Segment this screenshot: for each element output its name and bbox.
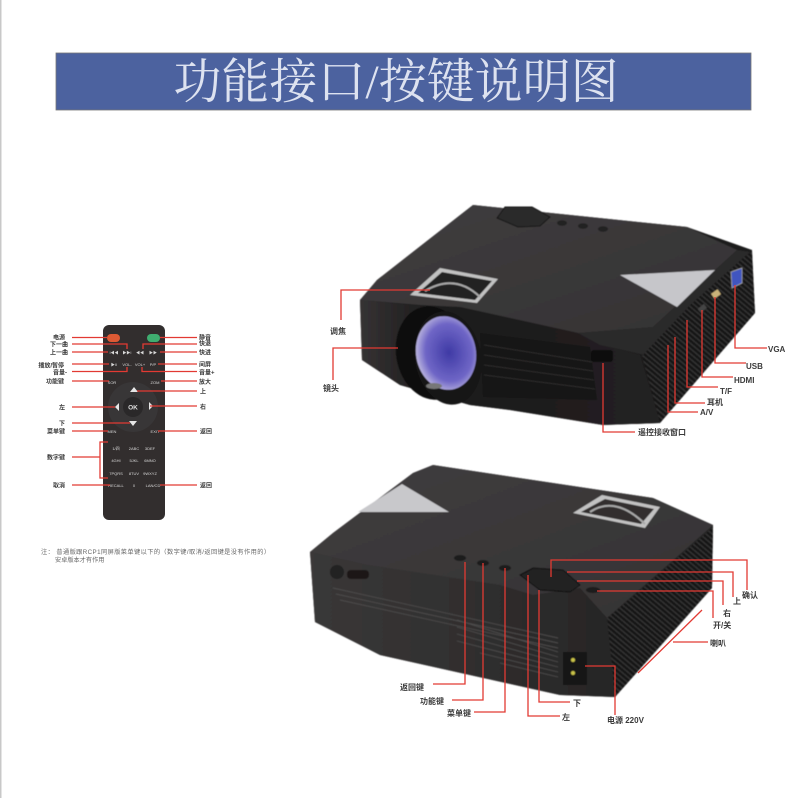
remote labels left [38,334,68,490]
remote labels right: 快退 [199,340,211,348]
remote key labels: 9WXYZ [143,471,157,476]
upper projector vent panel [480,333,597,400]
upper projector front face [360,300,660,425]
lower projector labels [400,590,758,725]
remote labels right: 上 [200,388,206,396]
upper projector labels: 耳机 [707,397,723,407]
lower projector light panel [358,484,449,512]
lower projector labels: 电源 220V [607,715,645,725]
upper projector labels: VGA [768,345,786,354]
remote labels left: 菜单键 [47,428,65,436]
remote labels left: 功能键 [46,378,64,386]
remote key labels: 3DEF [145,446,156,451]
remote labels right: 右 [200,403,206,411]
remote key labels: ZOM [151,380,159,385]
remote labels right: 放大 [199,378,211,386]
lower projector labels: 确认 [742,590,758,600]
upper projector labels: A/V [700,408,714,417]
lower projector labels: 左 [562,712,570,722]
remote labels left: 音量- [53,368,67,376]
remote key labels: 4GHI [111,458,121,463]
remote labels right: 间屏 [199,360,211,368]
remote key labels: I◀◀ [109,350,119,355]
remote control [103,325,165,520]
remote key labels: 7PQRS [109,471,123,476]
upper projector labels: HDMI [734,376,754,385]
footnote: 安卓版本才有作用 [55,556,104,564]
upper focus window [410,268,498,303]
lower projector front face [310,552,615,697]
remote labels right: 返回 [200,428,212,436]
upper projector labels: 遥控接收窗口 [638,427,686,437]
lower projector side grille [607,527,713,697]
lower projector labels: 开/关 [713,620,731,630]
lower projector labels: 下 [573,699,581,708]
projector: upper view [323,205,786,437]
upper projector vents [484,345,595,389]
upper projector side grille [642,252,755,423]
title banner: 功能接口/按键说明图 [173,56,619,109]
upper projector top face [360,205,737,333]
upper projector labels: T/F [720,387,732,396]
remote labels left: 下一曲 [50,340,68,348]
upper projector callout lines [333,285,767,432]
remote labels right [199,334,215,490]
remote key labels: 5JKL [129,458,139,463]
remote power button [107,334,120,342]
remote labels right: 音量+ [199,368,215,376]
remote key labels: MEN [108,429,117,434]
remote labels left: 电源 [53,334,65,342]
lower projector labels: 返回键 [400,682,424,692]
receiver window [591,350,613,362]
upper projector labels: 调焦 [330,326,346,336]
remote key labels: SOR [108,380,116,385]
lower projector labels: 功能键 [420,696,444,706]
lower projector labels: 菜单键 [447,708,471,718]
remote direction arrows [115,387,153,426]
lower projector body [310,465,713,697]
remote key labels: ▶▶ [149,350,157,355]
remote key labels: ◀◀ [136,350,144,355]
lower control pad [520,568,580,592]
remote labels left: 播放/暂停 [38,362,64,370]
page left edge [0,0,2,798]
remote key labels: 6MNO [144,458,156,463]
remote key labels: 2ABC [129,446,139,451]
remote labels left: 取消 [53,482,65,490]
remote labels right: 返回 [200,482,212,490]
upper projector labels [323,326,786,437]
upper projector light panel [620,270,715,307]
remote key labels: VOL- [122,362,132,367]
upper projector chamfer [578,250,750,355]
upper control pad [497,207,550,227]
footnote [41,548,270,564]
remote key labels: ▶▶I [122,350,132,355]
remote labels right: 静音 [199,334,211,342]
remote labels left: 上一曲 [50,348,68,356]
remote labels left: 左 [59,404,65,412]
remote key labels: 8TUV [129,471,139,476]
remote mute button [147,334,160,342]
remote labels left: 数字键 [47,454,65,462]
upper projector labels: USB [746,362,763,371]
lower projector top face [310,465,713,618]
projector: lower view [310,465,758,725]
lower focus window [573,495,660,528]
title banner [56,53,751,110]
remote key labels: OK [128,404,138,412]
lower projector labels: 喇叭 [710,638,726,648]
lower projector labels: 右 [723,608,731,618]
remote key labels: P/P [150,362,157,367]
remote labels left: 下 [59,420,65,428]
lower projector callout lines [433,560,747,716]
remote key labels: VOL+ [135,362,146,367]
lower projector labels: 上 [733,596,741,606]
footnote: 注： 普通版跟RCP1同屏版菜单键以下的（数字键/取消/返回键是没有作用的） [41,548,270,556]
lens [388,300,476,406]
remote key labels: RECALL [108,483,125,488]
lower receiver window [330,565,344,579]
remote key labels: EXIT [151,429,160,434]
remote key labels: 0 [133,483,136,488]
remote key labels: 1/四 [112,446,120,451]
remote labels right: 快进 [199,348,211,356]
power socket panel [563,652,587,685]
upper projector body [360,205,755,425]
remote callout lines [72,338,197,485]
VGA port [731,268,742,288]
lower projector vents [333,588,558,677]
remote key labels: LAN/CD [146,483,160,488]
remote key labels: ▶II [111,362,117,367]
upper projector labels: 镜头 [323,383,339,393]
remote key labels [108,350,160,488]
